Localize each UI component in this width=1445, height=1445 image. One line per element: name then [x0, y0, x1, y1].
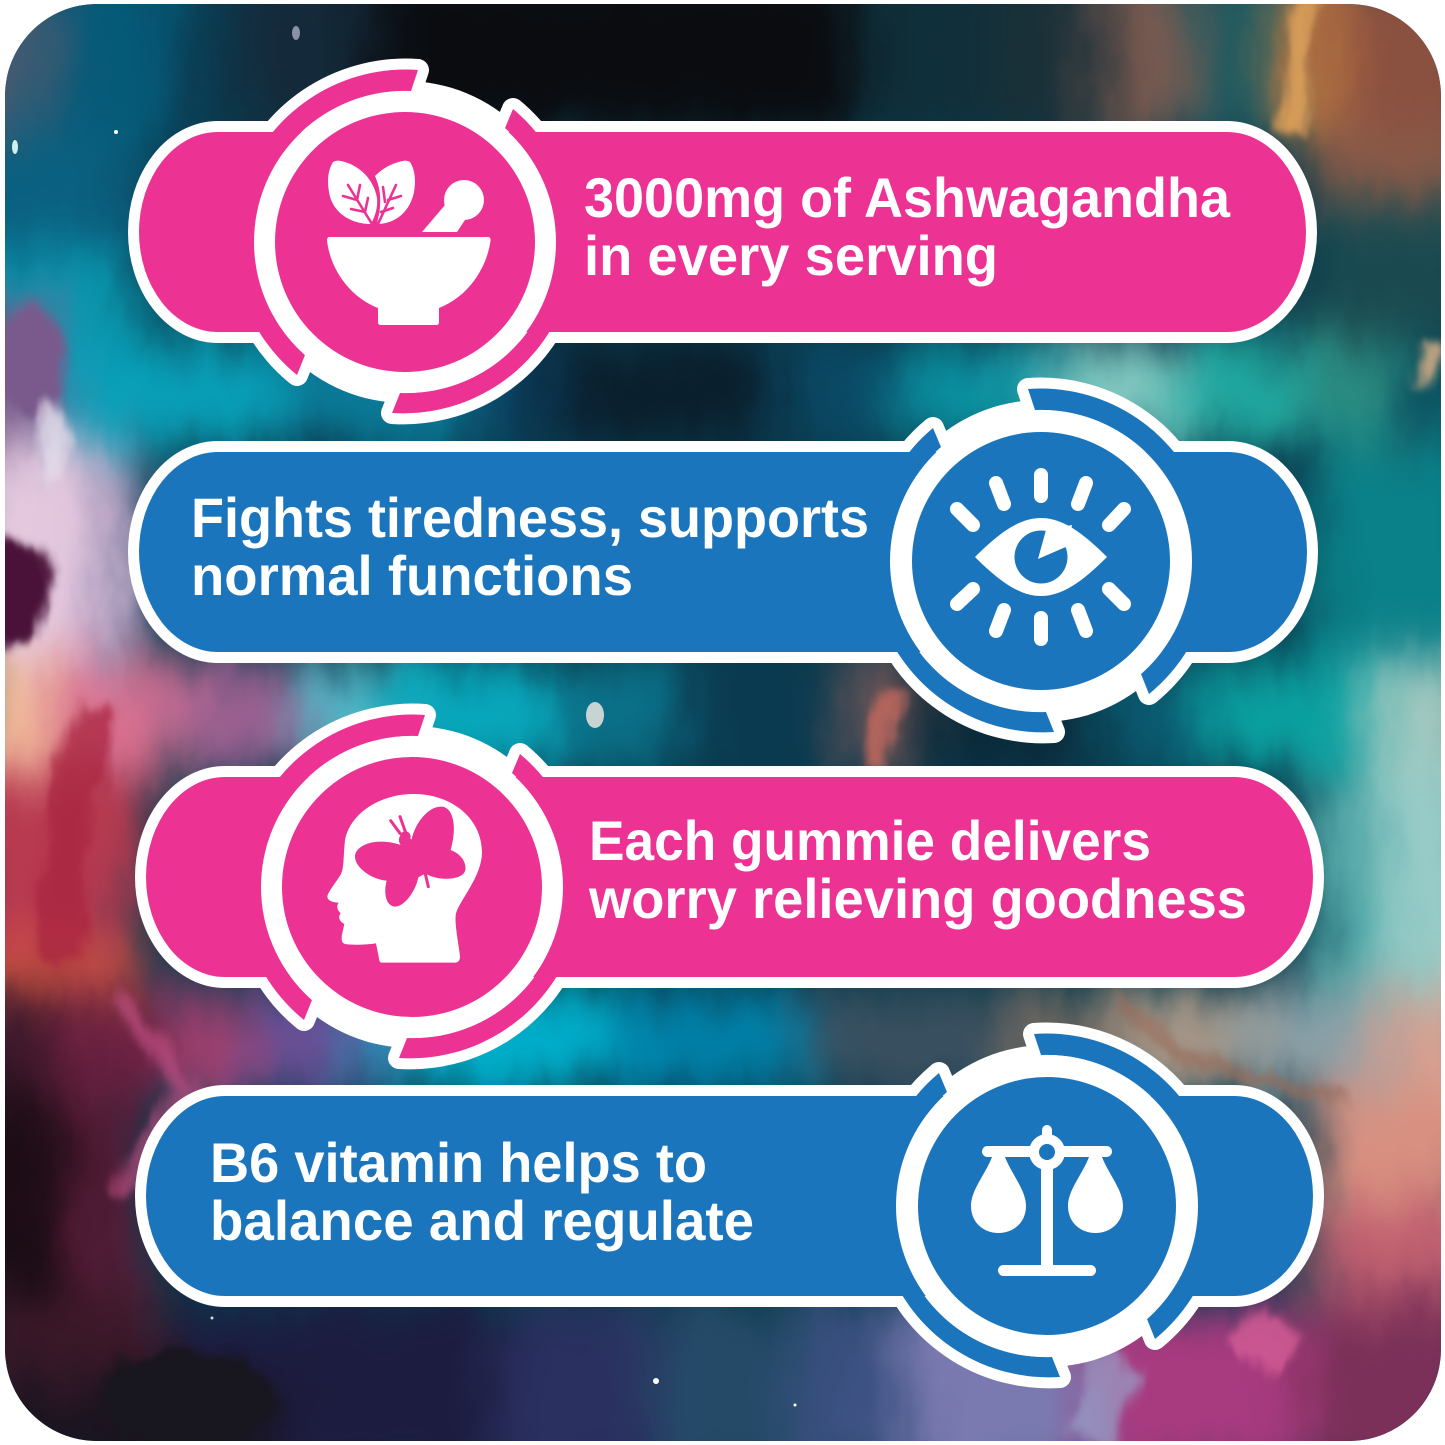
badge frame [146, 715, 1313, 1058]
icon: balance scales [971, 1125, 1123, 1276]
text: 3000mg of Ashwagandha: 3000mg of Ashwagandha [584, 166, 1231, 229]
badge frame [146, 1034, 1313, 1377]
text: 3000mg of Ashwagandha: in every serving [584, 224, 998, 287]
panel: B6 vitamin benefit [146, 1034, 1313, 1377]
text: fights tiredness: Fights tiredness, supports [191, 486, 869, 549]
text: fights tiredness: normal functions [191, 544, 633, 607]
badge frame [139, 389, 1307, 732]
badge frame [139, 70, 1306, 413]
icon: mortar, pestle and leaves [327, 161, 491, 325]
icon: eye with rays [957, 475, 1124, 639]
panel: ashwagandha benefit [139, 70, 1306, 413]
text: B6 vitamin: B6 vitamin helps to [210, 1131, 707, 1194]
panel: worry relief benefit [146, 715, 1313, 1058]
text: each gummie: Each gummie delivers [589, 809, 1151, 872]
text: each gummie: worry relieving goodness [588, 867, 1247, 930]
stars [12, 26, 796, 1406]
text: B6 vitamin: balance and regulate [210, 1189, 754, 1252]
panel: tiredness benefit [139, 389, 1307, 732]
icon: head with butterfly [327, 794, 482, 963]
